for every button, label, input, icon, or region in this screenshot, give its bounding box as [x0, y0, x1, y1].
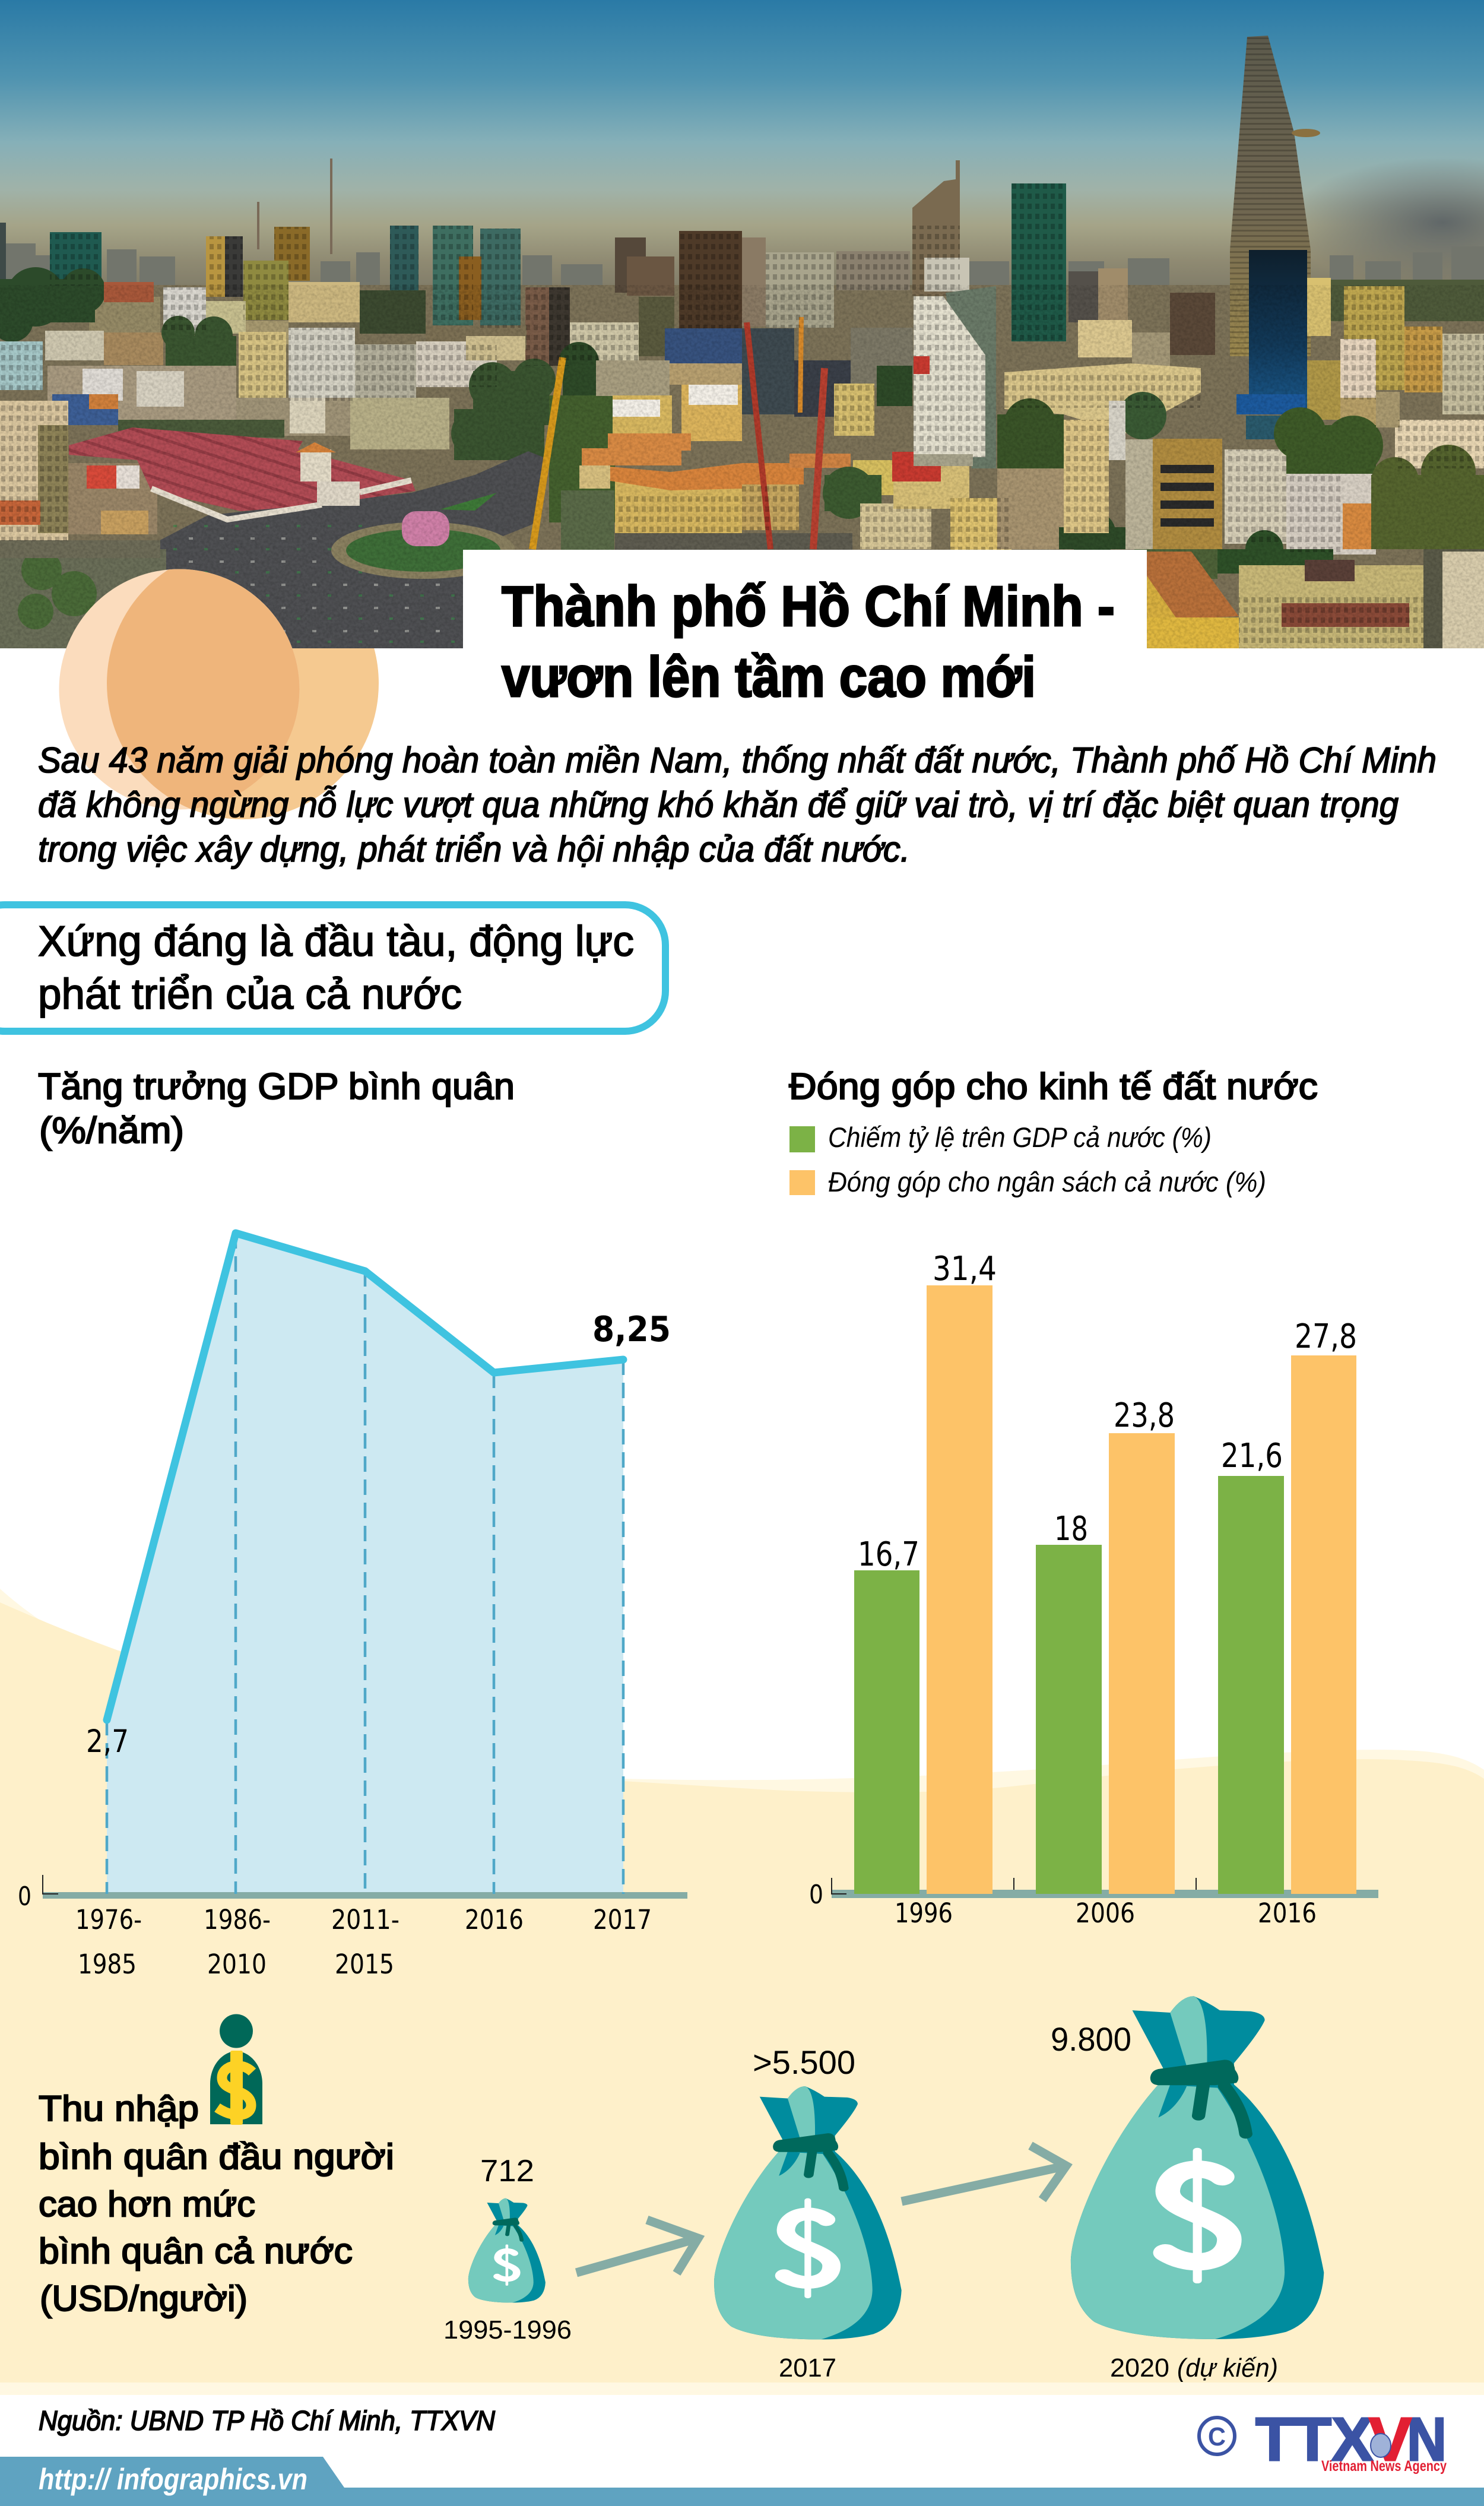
intro paragraph: Sau 43 năm giải phóng hoàn toàn miền Nam, thống nhất đất nước, Thành phố Hồ Chí Minh — [38, 740, 1437, 780]
section heading box — [0, 905, 665, 1031]
bar chart: contribution: 2016 — [1258, 1897, 1317, 1929]
photo: city texture overlay — [0, 285, 1484, 648]
icon: medium money bag — [714, 2086, 902, 2339]
photo: building windows — [0, 183, 1484, 648]
label: 1995-1996: 1995-1996 — [443, 2315, 572, 2345]
area chart: GDP growth — [18, 1233, 687, 1980]
label: 712: 712 — [480, 2154, 534, 2188]
photo: yellow colonial building — [579, 385, 851, 533]
income heading: (USD/người) — [40, 2279, 248, 2318]
logo: TTXVN: C — [1208, 2422, 1226, 2451]
logo: TTXVN: Vietnam News Agency — [1321, 2458, 1447, 2475]
arrow 1 — [576, 2220, 698, 2273]
bar chart: contribution: 2006 — [1076, 1897, 1135, 1929]
area chart: GDP growth: 2017 — [593, 1904, 652, 1935]
section heading box: phát triển của cả nước — [38, 971, 462, 1018]
logo: TTXVN: V — [1369, 2405, 1412, 2473]
hero photo: Ho Chi Minh City skyline — [0, 0, 1484, 648]
area chart: GDP growth: 2011- — [331, 1904, 399, 1935]
title: vươn lên tầm cao mới — [502, 645, 1036, 709]
bar chart: contribution: 31,4 — [933, 1250, 997, 1288]
title — [502, 575, 1115, 709]
area chart: GDP growth: 1986- — [204, 1904, 271, 1935]
photo: white angular tower — [914, 286, 996, 468]
area chart: GDP growth: 8,25 — [592, 1309, 671, 1349]
label: >5.500: >5.500 — [753, 2044, 855, 2081]
area chart: GDP growth: 1985 — [78, 1949, 137, 1980]
area chart: GDP growth: 2015 — [335, 1949, 394, 1980]
area chart: GDP growth: 2,7 — [86, 1724, 129, 1760]
decorative circle over photo — [59, 569, 299, 810]
income heading: cao hơn mức — [39, 2184, 255, 2224]
income heading — [39, 2089, 394, 2318]
title box — [463, 550, 1147, 651]
bar chart: contribution: 23,8 — [1114, 1396, 1175, 1435]
photo: trees top left — [0, 267, 106, 342]
photo: roundabout — [331, 511, 515, 579]
heading: GDP growth: Tăng trưởng GDP bình quân — [38, 1066, 515, 1107]
area chart: GDP growth: 1976- — [75, 1904, 142, 1935]
area chart: GDP growth: 2010 — [207, 1949, 267, 1980]
logo: TTXVN: TTX — [1255, 2405, 1373, 2473]
bar chart: contribution: 16,7 — [858, 1535, 919, 1574]
bar chart: contribution: 0 — [809, 1880, 823, 1910]
legend: Chiếm tỷ lệ trên GDP cả nước (%) — [828, 1121, 1212, 1153]
income heading: Thu nhập — [39, 2089, 199, 2128]
icon: large money bag — [1071, 1996, 1324, 2339]
label: 2020 projected: 2020 — [1110, 2353, 1169, 2383]
heading: contribution: Đóng góp cho kinh tế đất nước — [789, 1066, 1318, 1107]
arrow 2 — [902, 2146, 1066, 2201]
photo: traffic on road — [166, 522, 463, 648]
heading: GDP growth — [38, 1066, 515, 1151]
income heading: bình quân đầu người — [39, 2137, 394, 2176]
icon: small money bag — [468, 2198, 546, 2302]
bar chart: contribution: 27,8 — [1295, 1317, 1357, 1356]
background: cream wave — [0, 1602, 1484, 2383]
bar chart: contribution: 18 — [1054, 1510, 1088, 1548]
title: Thành phố Hồ Chí Minh - — [502, 575, 1115, 638]
footer band — [0, 2457, 1484, 2506]
section heading box: Xứng đáng là đầu tàu, động lực — [38, 918, 634, 965]
intro paragraph: đã không ngừng nỗ lực vượt qua những khó khăn để giữ vai trò, vị trí đặc biệt quan trọng — [38, 785, 1399, 825]
photo: central trees — [451, 342, 615, 522]
bar chart: contribution: 21,6 — [1221, 1437, 1283, 1475]
legend — [789, 1121, 1266, 1197]
icon: person with dollar — [210, 2014, 262, 2125]
legend: Đóng góp cho ngân sách cả nước (%) — [828, 1166, 1266, 1197]
area chart: GDP growth: 2016 — [465, 1904, 524, 1935]
label: 9.800: 9.800 — [1051, 2020, 1131, 2058]
intro paragraph — [38, 740, 1437, 869]
income heading: bình quân cả nước — [39, 2231, 353, 2271]
logo: TTXVN — [1199, 2405, 1447, 2475]
photo: Ben Thanh market roof — [69, 427, 416, 519]
area chart: GDP growth: 0 — [18, 1881, 31, 1912]
bar chart: contribution: 1996 — [895, 1897, 953, 1929]
background: pale cream wave — [0, 1589, 1484, 2395]
footer url: http:// infographics.vn — [39, 2463, 307, 2496]
label: 2020 projected: (dự kiến) — [1177, 2353, 1278, 2383]
decorative circle behind photo — [107, 547, 379, 819]
photo: road — [148, 451, 543, 648]
heading: GDP growth: (%/năm) — [39, 1110, 184, 1151]
intro paragraph: trong việc xây dựng, phát triển và hội nhập của đất nước. — [38, 829, 910, 869]
logo: TTXVN: N — [1407, 2405, 1447, 2473]
label: 2020 projected — [1110, 2353, 1278, 2383]
label: 2017: 2017 — [779, 2353, 836, 2383]
photo: Bitexco tower — [1230, 36, 1320, 414]
photo: cranes — [532, 317, 825, 549]
bar chart: contribution — [809, 1250, 1378, 1929]
source line: Nguồn: UBND TP Hồ Chí Minh, TTXVN — [39, 2405, 496, 2436]
